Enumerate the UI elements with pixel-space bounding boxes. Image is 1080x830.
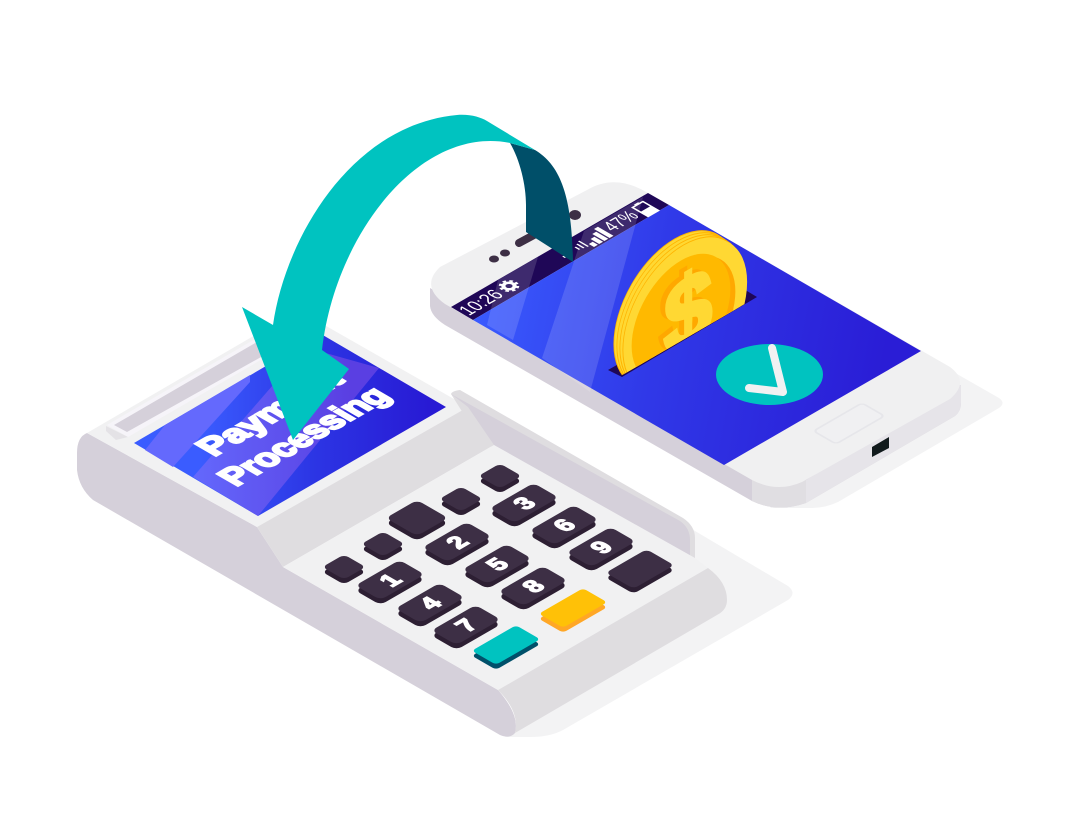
key 4: 4 bbox=[413, 593, 449, 614]
receipt printer slot bbox=[106, 335, 278, 440]
terminal screen bbox=[134, 334, 446, 516]
dollar sign: $ bbox=[664, 242, 712, 382]
key 5 bbox=[462, 544, 532, 589]
key 3 bbox=[489, 483, 559, 528]
bezel top face bbox=[87, 310, 468, 527]
large blank key bbox=[386, 500, 448, 541]
key 5: 5 bbox=[480, 554, 515, 575]
status bar bbox=[451, 193, 669, 320]
key 2 bbox=[422, 522, 492, 567]
dollar sign bbox=[658, 266, 712, 350]
gold coin bbox=[613, 230, 748, 376]
terminal shadow bbox=[505, 528, 792, 737]
phone right side bbox=[806, 385, 961, 503]
blank key bbox=[361, 532, 405, 562]
key 1: 1 bbox=[373, 570, 408, 591]
status battery percent: 47% bbox=[598, 208, 644, 235]
screen light panels bbox=[145, 352, 379, 516]
phone bbox=[430, 182, 1002, 508]
terminal screen text: Processing bbox=[209, 381, 399, 491]
key 9: 9 bbox=[584, 537, 619, 558]
yellow key bbox=[539, 588, 607, 633]
key 1 bbox=[355, 560, 425, 605]
phone top face bbox=[431, 182, 960, 487]
blank key bbox=[322, 554, 366, 584]
speaker and camera bbox=[489, 210, 581, 262]
key 4 bbox=[395, 583, 465, 628]
phone shadow bbox=[770, 370, 1002, 508]
phone body side bbox=[430, 288, 961, 508]
keypad deck bbox=[283, 445, 708, 690]
confirmation check badge bbox=[716, 344, 823, 405]
slope under bezel bbox=[257, 407, 494, 567]
dollar sign: $ bbox=[659, 240, 707, 380]
key 6: 6 bbox=[547, 515, 582, 536]
key 7 bbox=[431, 605, 501, 650]
keypad bbox=[322, 464, 674, 670]
key 6 bbox=[529, 505, 599, 550]
key 9 bbox=[566, 527, 636, 572]
blank key bbox=[439, 486, 483, 516]
key 3: 3 bbox=[507, 493, 542, 514]
status signal bars bbox=[578, 227, 613, 247]
rear wedge outer bbox=[451, 390, 695, 560]
key 8 bbox=[498, 566, 568, 611]
arrow underside bbox=[510, 143, 573, 262]
curved arrow from phone to terminal bbox=[242, 115, 573, 440]
front slope bbox=[498, 568, 727, 733]
key 2: 2 bbox=[440, 532, 475, 553]
status wifi icon bbox=[557, 241, 588, 259]
phone corner side bbox=[752, 478, 806, 508]
terminal screen text: Payment bbox=[187, 365, 353, 461]
coin slot bbox=[608, 291, 757, 377]
status gear icon bbox=[497, 279, 521, 293]
illustration: payment from phone to terminal bbox=[77, 114, 1002, 737]
blank key bbox=[478, 464, 522, 494]
key 7: 7 bbox=[449, 615, 484, 636]
screen light stripes bbox=[487, 197, 643, 392]
phone screen bbox=[473, 205, 921, 465]
rear wedge inner bbox=[451, 394, 690, 558]
home button bbox=[813, 403, 885, 444]
charging port bbox=[872, 437, 889, 457]
wide blank key bbox=[606, 549, 674, 594]
teal key bbox=[472, 625, 540, 670]
status battery icon bbox=[631, 200, 658, 216]
key 8: 8 bbox=[516, 576, 551, 597]
status time: 10:26 bbox=[454, 287, 509, 319]
arrow body and head bbox=[242, 115, 535, 440]
terminal left side bbox=[77, 433, 516, 737]
payment terminal bbox=[77, 310, 792, 737]
